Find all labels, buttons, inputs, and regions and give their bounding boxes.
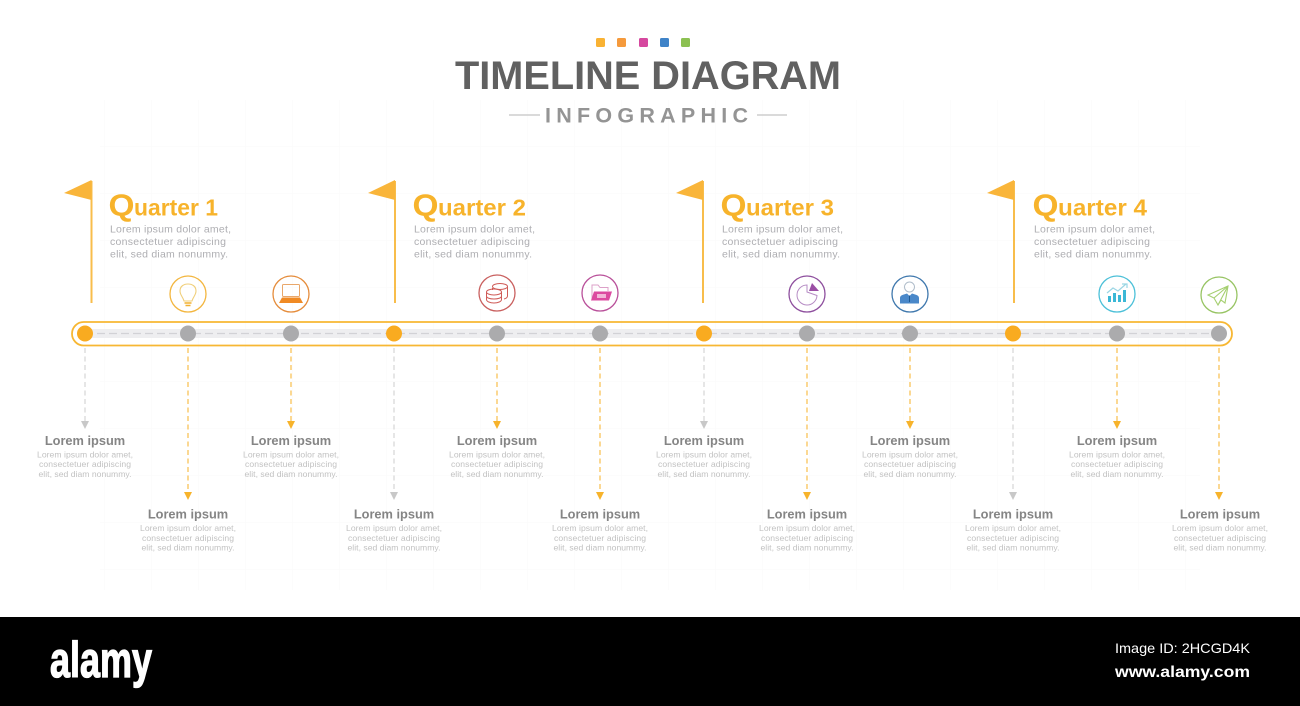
label: milestone 2: Lorem ipsum bbox=[148, 506, 228, 522]
label: milestone 12: elit, sed diam nonummy. bbox=[1174, 542, 1266, 552]
icon: paper plane bbox=[1201, 277, 1237, 313]
label: milestone 7: Lorem ipsum bbox=[664, 433, 744, 448]
label: milestone 3: Lorem ipsum dolor amet, bbox=[243, 450, 339, 460]
heading: quarter 3 bbox=[720, 188, 834, 222]
label: milestone 7: Lorem ipsum dolor amet, bbox=[656, 450, 752, 460]
flag: quarter 4 bbox=[987, 180, 1015, 303]
label: milestone 12: Lorem ipsum bbox=[1180, 506, 1260, 522]
text: quarter 1: consectetuer adipiscing bbox=[110, 236, 226, 248]
heading: quarter 4: uarter 4 bbox=[1058, 194, 1147, 220]
label: milestone 6 bbox=[552, 506, 648, 552]
label: milestone 6: Lorem ipsum dolor amet, bbox=[552, 523, 648, 533]
heading: quarter 1 bbox=[108, 188, 218, 222]
label: milestone 5: elit, sed diam nonummy. bbox=[450, 469, 544, 479]
footer bar bbox=[0, 617, 1300, 706]
label: milestone 2 bbox=[140, 506, 236, 552]
label: milestone 9: Lorem ipsum dolor amet, bbox=[862, 450, 958, 460]
label: milestone 11: elit, sed diam nonummy. bbox=[1070, 469, 1164, 479]
text: quarter 1 bbox=[110, 224, 231, 260]
text: quarter 4: Lorem ipsum dolor amet, bbox=[1034, 224, 1155, 236]
label: milestone 10: Lorem ipsum dolor amet, bbox=[965, 523, 1061, 533]
subtitle: INFOGRAPHIC bbox=[545, 104, 748, 128]
label: milestone 4: Lorem ipsum bbox=[354, 506, 434, 522]
label: milestone 3 bbox=[243, 433, 339, 479]
label: milestone 10 bbox=[965, 506, 1061, 552]
label: milestone 11 bbox=[1069, 433, 1165, 479]
label: milestone 11: Lorem ipsum dolor amet, bbox=[1069, 450, 1165, 460]
label: milestone 12: consectetuer adipiscing bbox=[1174, 533, 1266, 543]
label: milestone 1: elit, sed diam nonummy. bbox=[38, 469, 132, 479]
flag: quarter 1 bbox=[64, 180, 92, 303]
label: milestone 2: elit, sed diam nonummy. bbox=[142, 542, 234, 552]
icon: coins bbox=[479, 275, 515, 311]
label: milestone 4 bbox=[346, 506, 442, 552]
label: milestone 5: consectetuer adipiscing bbox=[451, 459, 543, 469]
heading: quarter 4 bbox=[1032, 188, 1147, 222]
label: milestone 8: consectetuer adipiscing bbox=[761, 533, 853, 543]
text: quarter 2: elit, sed diam nonummy. bbox=[414, 248, 532, 260]
heading: quarter 4: Q bbox=[1032, 188, 1058, 222]
icon: growth chart bbox=[1099, 276, 1135, 312]
label: milestone 8: Lorem ipsum dolor amet, bbox=[759, 523, 855, 533]
label: milestone 8 bbox=[759, 506, 855, 552]
label: milestone 6: consectetuer adipiscing bbox=[554, 533, 646, 543]
heading: quarter 2 bbox=[412, 188, 526, 222]
label: milestone 12 bbox=[1172, 506, 1268, 552]
label: milestone 10: Lorem ipsum bbox=[973, 506, 1053, 522]
label: milestone 5: Lorem ipsum bbox=[457, 433, 537, 448]
icon: folder bbox=[582, 275, 618, 311]
icon: pie chart bbox=[789, 276, 825, 312]
icon: light bulb bbox=[170, 276, 206, 312]
text: quarter 2: Lorem ipsum dolor amet, bbox=[414, 224, 535, 236]
label: milestone 3: elit, sed diam nonummy. bbox=[244, 469, 338, 479]
heading: quarter 3: Q bbox=[720, 188, 746, 222]
heading: quarter 1: Q bbox=[108, 188, 134, 222]
label: milestone 5: Lorem ipsum dolor amet, bbox=[449, 450, 545, 460]
label: milestone 1: consectetuer adipiscing bbox=[39, 459, 131, 469]
label: milestone 2: Lorem ipsum dolor amet, bbox=[140, 523, 236, 533]
footer bar: alamy bbox=[50, 632, 152, 688]
label: milestone 4: Lorem ipsum dolor amet, bbox=[346, 523, 442, 533]
arrowheads bbox=[81, 421, 1223, 500]
timeline track bbox=[72, 322, 1232, 346]
label: milestone 5 bbox=[449, 433, 545, 479]
heading: quarter 2: Q bbox=[412, 188, 438, 222]
flag: quarter 2 bbox=[368, 180, 396, 303]
label: milestone 1 bbox=[37, 433, 133, 479]
flag: quarter 3 bbox=[676, 180, 704, 303]
label: milestone 12: Lorem ipsum dolor amet, bbox=[1172, 523, 1268, 533]
label: milestone 1: Lorem ipsum bbox=[45, 433, 125, 448]
label: milestone 3: consectetuer adipiscing bbox=[245, 459, 337, 469]
text: quarter 3: Lorem ipsum dolor amet, bbox=[722, 224, 843, 236]
label: milestone 11: consectetuer adipiscing bbox=[1071, 459, 1163, 469]
colour squares bbox=[596, 38, 690, 47]
text: quarter 4 bbox=[1034, 224, 1155, 260]
text: quarter 4: elit, sed diam nonummy. bbox=[1034, 248, 1152, 260]
text: quarter 1: elit, sed diam nonummy. bbox=[110, 248, 228, 260]
label: milestone 9: Lorem ipsum bbox=[870, 433, 950, 448]
label: milestone 9: consectetuer adipiscing bbox=[864, 459, 956, 469]
text: quarter 3: elit, sed diam nonummy. bbox=[722, 248, 840, 260]
label: milestone 7: elit, sed diam nonummy. bbox=[658, 469, 750, 479]
text: quarter 2 bbox=[414, 224, 535, 260]
text: quarter 4: consectetuer adipiscing bbox=[1034, 236, 1150, 248]
title: TIMELINE DIAGRAM bbox=[455, 54, 841, 98]
arrows bbox=[85, 348, 1219, 493]
heading: quarter 1: uarter 1 bbox=[134, 194, 218, 220]
icon: laptop bbox=[273, 276, 309, 312]
label: milestone 1: Lorem ipsum dolor amet, bbox=[37, 450, 133, 460]
label: milestone 4: elit, sed diam nonummy. bbox=[348, 542, 440, 552]
label: milestone 11: Lorem ipsum bbox=[1077, 433, 1157, 448]
text: quarter 3 bbox=[722, 224, 843, 260]
text: quarter 3: consectetuer adipiscing bbox=[722, 236, 838, 248]
icon: businessman bbox=[892, 276, 928, 312]
label: milestone 6: Lorem ipsum bbox=[560, 506, 640, 522]
label: milestone 9: elit, sed diam nonummy. bbox=[864, 469, 956, 479]
label: milestone 4: consectetuer adipiscing bbox=[348, 533, 440, 543]
label: milestone 9 bbox=[862, 433, 958, 479]
label: milestone 7: consectetuer adipiscing bbox=[658, 459, 750, 469]
label: milestone 7 bbox=[656, 433, 752, 479]
text: quarter 1: Lorem ipsum dolor amet, bbox=[110, 224, 231, 236]
footer bar: Image ID: 2HCGD4K bbox=[1115, 640, 1251, 656]
label: milestone 10: elit, sed diam nonummy. bbox=[966, 542, 1060, 552]
label: milestone 6: elit, sed diam nonummy. bbox=[554, 542, 646, 552]
label: milestone 2: consectetuer adipiscing bbox=[142, 533, 234, 543]
text: quarter 2: consectetuer adipiscing bbox=[414, 236, 530, 248]
heading: quarter 3: uarter 3 bbox=[746, 194, 834, 220]
footer bar: www.alamy.com bbox=[1114, 664, 1250, 681]
label: milestone 8: elit, sed diam nonummy. bbox=[760, 542, 854, 552]
label: milestone 10: consectetuer adipiscing bbox=[967, 533, 1059, 543]
timeline nodes bbox=[77, 326, 1227, 342]
label: milestone 3: Lorem ipsum bbox=[251, 433, 331, 448]
label: milestone 8: Lorem ipsum bbox=[767, 506, 847, 522]
heading: quarter 2: uarter 2 bbox=[438, 194, 526, 220]
